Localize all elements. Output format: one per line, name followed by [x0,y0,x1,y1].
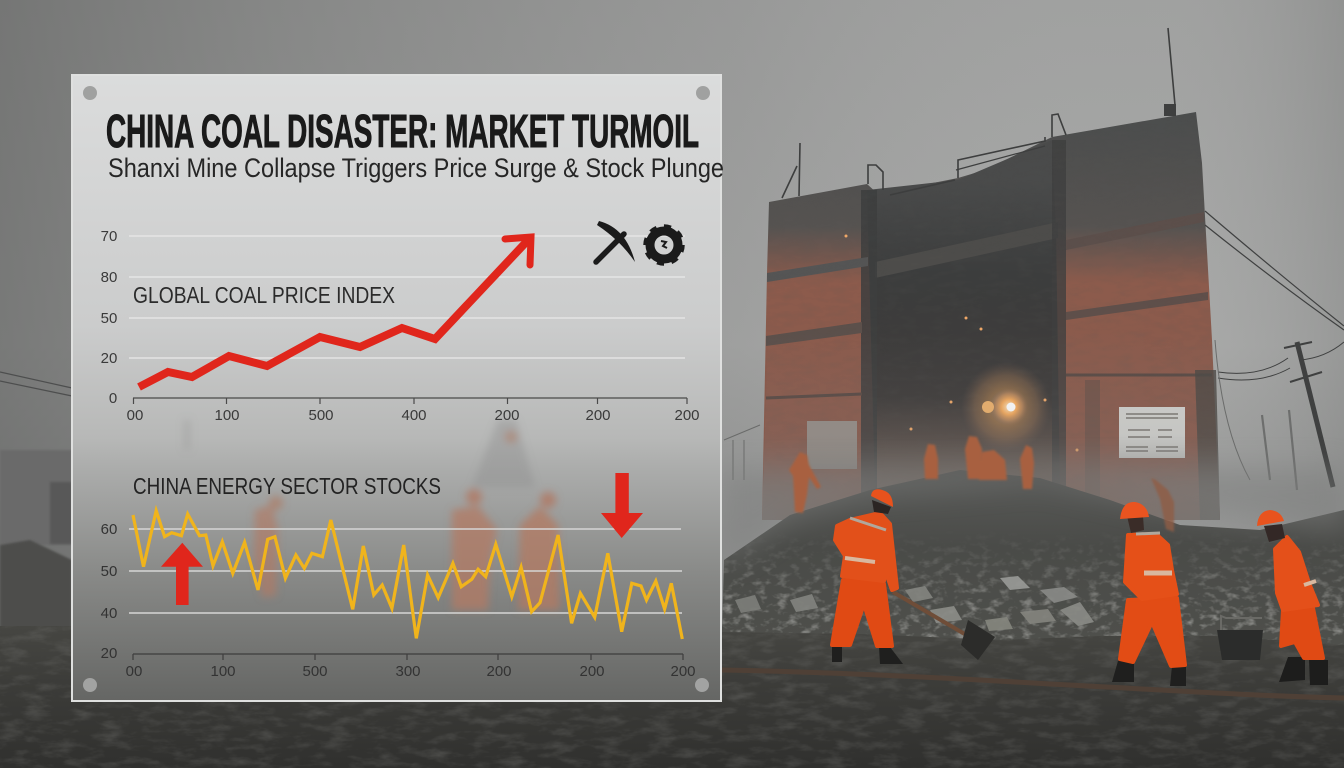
hose on the ground [722,670,1344,698]
pin: bottom left [83,678,97,692]
x axis labels: 200 [579,663,605,680]
chart: china energy sector stocks [101,473,696,680]
y axis labels: 50 [101,310,117,327]
y axis labels [101,228,117,407]
title: CHINA COAL DISASTER: MARKET TURMOIL [106,105,699,157]
x axis labels: 500 [302,663,328,680]
icon: pickaxe [596,221,635,262]
x axis labels: 300 [395,663,421,680]
building lamp glow [844,234,1078,452]
pin: top right [696,86,710,100]
y axis labels: 40 [101,605,117,622]
signboards on building [807,407,1185,469]
y axis labels: 20 [101,645,117,662]
chart heading: CHINA ENERGY SECTOR STOCKS [133,473,441,499]
x axis labels: 200 [670,663,696,680]
middle worker [1112,502,1186,686]
x axis labels [127,407,700,424]
y axis labels: 20 [101,350,117,367]
worker with shovel [832,489,995,664]
x axis labels: 400 [401,407,427,424]
x axis labels: 200 [674,407,700,424]
chart: global coal price index [101,228,700,424]
x axis labels [126,663,696,680]
background small workers in fog [789,436,1174,532]
y axis labels: 50 [101,563,117,580]
subtitle: Shanxi Mine Collapse Triggers Price Surge & Stock Plunge [108,153,724,183]
x axis labels: 00 [126,663,142,680]
chart heading: GLOBAL COAL PRICE INDEX [133,282,395,308]
x axis labels: 100 [214,407,240,424]
x axis labels: 200 [494,407,520,424]
panel: glass chart card [72,75,724,701]
arrow: up [161,543,203,605]
x axis labels: 00 [127,407,143,424]
background: collapsed mine building [762,28,1222,522]
y axis labels: 70 [101,228,117,245]
rubble pile [722,468,1344,645]
background: ground [0,626,1344,768]
ghost figures behind the glass [184,420,560,610]
right worker [1217,510,1328,685]
y axis labels [101,521,117,662]
yellow falling line [133,511,682,639]
background: distant left shed and wires [0,372,72,630]
y axis labels: 60 [101,521,117,538]
icon: gear [646,226,682,264]
pin: top left [83,86,97,100]
x axis labels: 100 [210,663,236,680]
y axis labels: 80 [101,269,117,286]
power poles and wires [724,211,1344,490]
x axis labels: 200 [585,407,611,424]
building fog [762,330,1220,520]
pin: bottom right [695,678,709,692]
y axis labels: 0 [109,390,117,407]
red rising line with arrow [139,237,531,387]
arrow: down [601,473,643,538]
x axis labels: 500 [308,407,334,424]
x axis labels: 200 [486,663,512,680]
